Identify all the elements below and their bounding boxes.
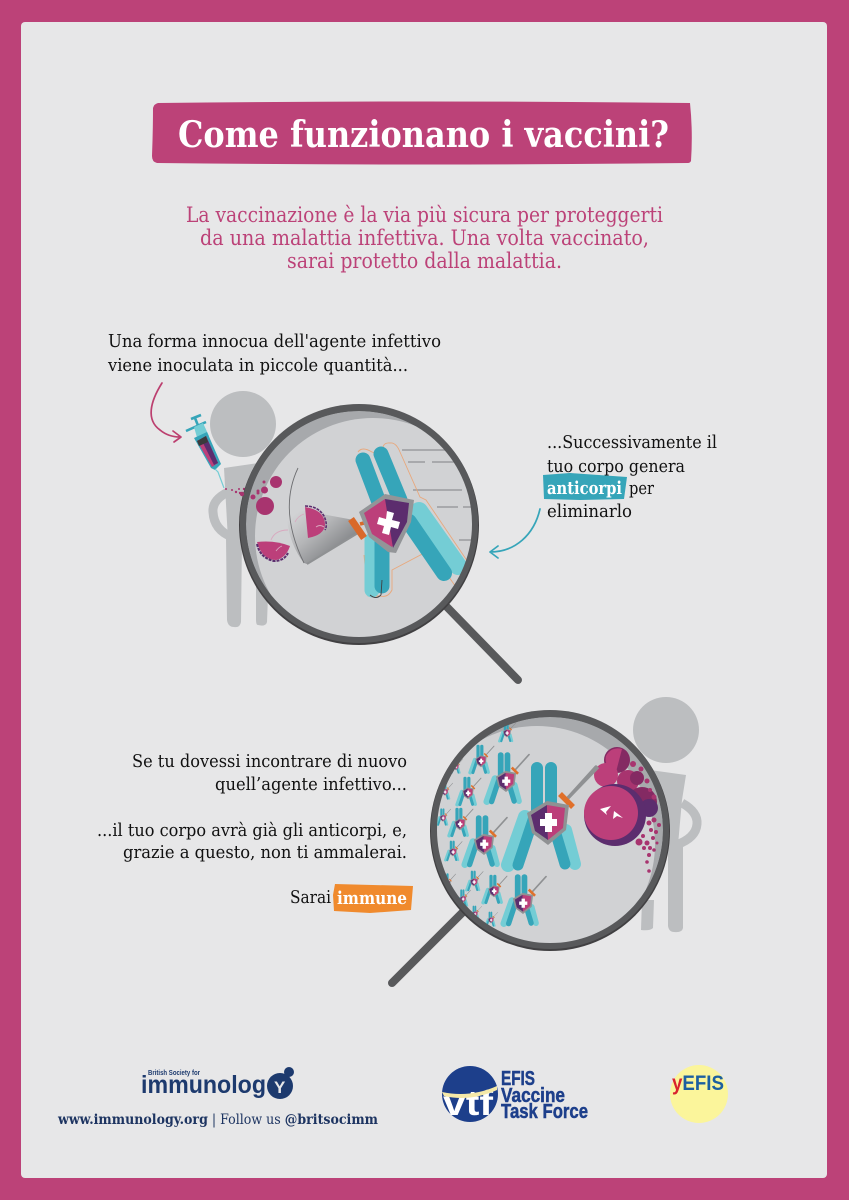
- logo: British Society for Immunology: Y: [274, 1078, 286, 1097]
- text: second step caption: [97, 751, 413, 913]
- text: second step caption: quell’agente infettivo...: [215, 774, 407, 795]
- figure: person 1: [210, 391, 276, 627]
- figure: person 2: [633, 697, 699, 932]
- text: second step caption: Se tu dovessi incontrare di nuovo: [132, 751, 407, 772]
- antibody 1: [363, 454, 458, 590]
- logo: yEFIS: yEFIS: [672, 1072, 724, 1095]
- dots: injected agent outside lens: [225, 488, 245, 494]
- magnifier handle 1: [445, 605, 518, 680]
- icon: syringe: [186, 415, 224, 488]
- magnifier 2: [419, 710, 670, 962]
- shield: [359, 494, 414, 553]
- logo: EFIS Vaccine Task Force: Vaccine: [501, 1085, 565, 1107]
- half virus 2: [257, 530, 290, 561]
- logo: EFIS Vaccine Task Force: EFIS: [501, 1068, 535, 1090]
- text: second step caption: Sarai: [290, 887, 331, 908]
- logo: EFIS Vaccine Task Force: Task Force: [501, 1101, 588, 1123]
- highlight: immune: immune: [337, 888, 407, 909]
- half virus 1: [295, 506, 326, 538]
- highlight: immune: [333, 884, 413, 913]
- highlight: anticorpi: [543, 473, 627, 500]
- logo: British Society for Immunology: British Society for: [148, 1070, 200, 1077]
- magnifier 1: [239, 404, 491, 654]
- footer text: website and handle: www.immunology.org | Follow us @britsocimm: [57, 1112, 378, 1128]
- sword wedge: [289, 514, 356, 564]
- arrow: teal to antibody: [490, 509, 540, 558]
- magnifier handle 2: [392, 910, 465, 983]
- scattered particles: [630, 761, 661, 873]
- arrow: pink to syringe: [151, 383, 181, 442]
- intro text: [186, 203, 663, 273]
- logo: EFIS Vaccine Task Force: vtf: [443, 1084, 493, 1123]
- text: second step caption: ...il tuo corpo avrà già gli anticorpi, e,: [97, 820, 407, 841]
- title: [152, 102, 692, 164]
- sword guard: [351, 519, 364, 538]
- small antibodies: [437, 723, 546, 926]
- logo: British Society for Immunology: immunolog: [141, 1071, 266, 1099]
- intro text: da una malattia infettiva. Una volta vaccinato,: [200, 226, 649, 250]
- speed lines: [402, 450, 472, 540]
- text: antibody caption: tuo corpo genera: [547, 456, 685, 477]
- text: second step caption: grazie a questo, non ti ammalerai.: [123, 842, 407, 863]
- title: Come funzionano i vaccini?: [178, 114, 669, 156]
- highlight: anticorpi: anticorpi: [547, 478, 622, 499]
- text: antibody caption: ...Successivamente il: [547, 432, 717, 453]
- text: antibody caption: eliminarlo: [547, 501, 632, 522]
- text: first step caption: [107, 331, 441, 376]
- antibody outlines: [358, 443, 470, 596]
- virus particles: [250, 476, 282, 515]
- sword to virus: [568, 767, 598, 798]
- logo: EFIS Vaccine Task Force: [442, 1066, 588, 1123]
- cluster of viruses: [584, 747, 658, 846]
- lens interior: [437, 726, 655, 943]
- lens interior: [255, 418, 472, 637]
- text: antibody caption: per: [629, 478, 654, 499]
- intro text: La vaccinazione è la via più sicura per proteggerti: [186, 203, 663, 227]
- intro text: sarai protetto dalla malattia.: [287, 249, 562, 273]
- text: first step caption: Una forma innocua dell'agente infettivo: [108, 331, 441, 352]
- dots: lens overlap particles: [240, 492, 244, 496]
- text: first step caption: viene inoculata in piccole quantità...: [107, 355, 408, 376]
- large antibody: [508, 767, 596, 865]
- text: antibody caption: [543, 432, 717, 522]
- logo: yEFIS: [670, 1065, 728, 1123]
